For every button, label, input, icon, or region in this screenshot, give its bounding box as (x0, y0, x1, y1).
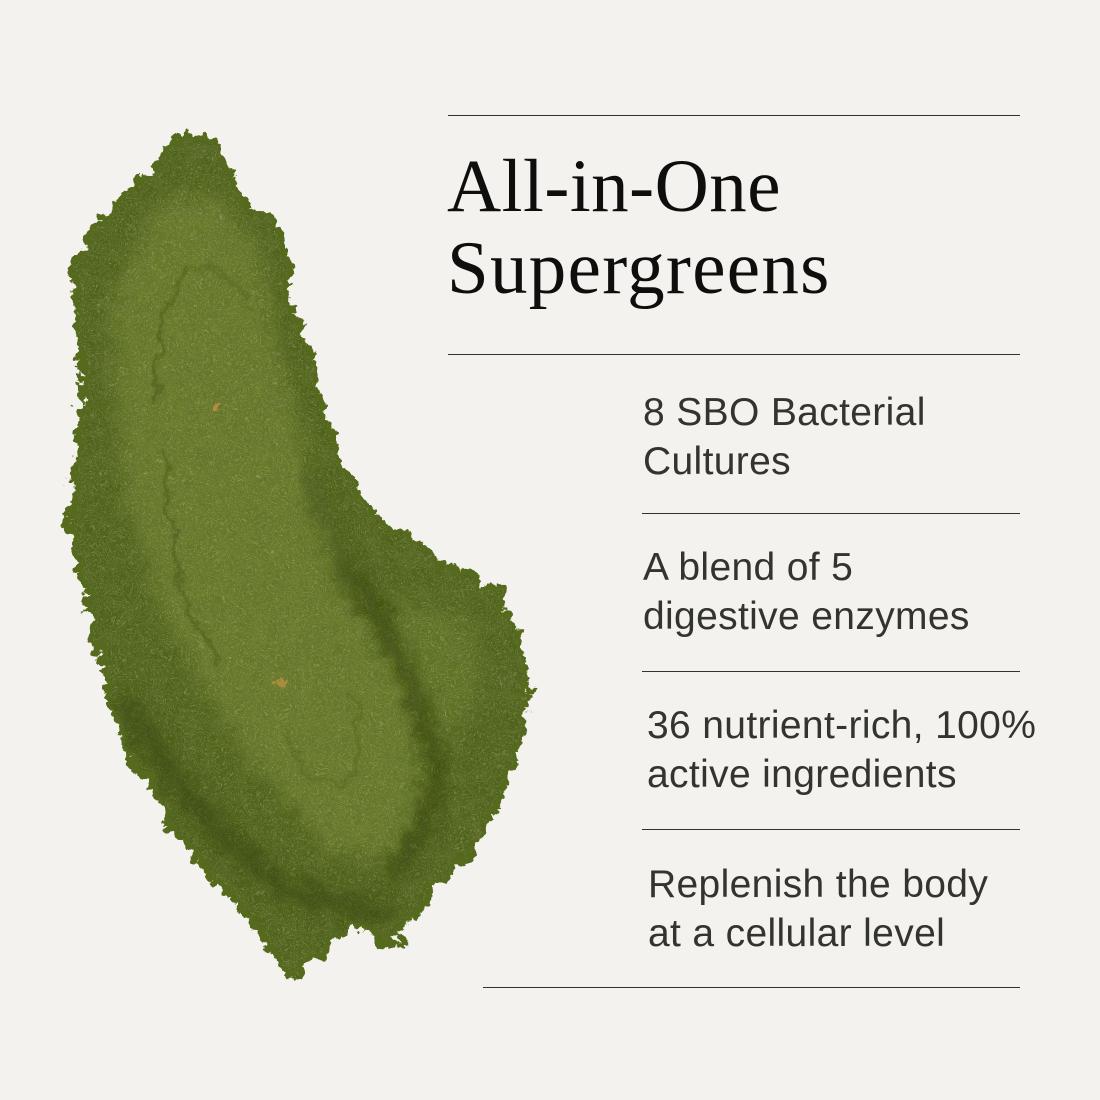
feature: bacterial cultures (643, 391, 926, 483)
feature: replenish: Replenish the body (648, 863, 988, 906)
bottom rule (483, 987, 1020, 988)
feature: digestive enzymes (643, 546, 970, 638)
title rule (448, 354, 1020, 355)
feature: replenish (648, 863, 988, 955)
feature: active ingredients (647, 704, 1036, 796)
feature: digestive enzymes: digestive enzymes (643, 595, 970, 638)
feature: bacterial cultures: 8 SBO Bacterial (643, 391, 926, 434)
powder swatch illustration (60, 128, 538, 981)
rule 1 (642, 513, 1020, 514)
inner smooth area (68, 138, 527, 977)
edge crumbs (71, 133, 527, 978)
feature: replenish: at a cellular level (648, 912, 945, 955)
title: All-in-One (447, 145, 781, 228)
feature: active ingredients: active ingredients (647, 753, 957, 796)
powder mass (69, 138, 527, 977)
rule 2 (642, 671, 1020, 672)
title: Supergreens (447, 227, 831, 310)
feature: digestive enzymes: A blend of 5 (643, 546, 853, 589)
dark crease shadows (350, 570, 437, 875)
rule 3 (642, 829, 1020, 830)
feature: active ingredients: 36 nutrient-rich, 100% (647, 704, 1036, 747)
powder body (50, 110, 550, 1000)
top rule (448, 115, 1020, 116)
title (447, 145, 831, 310)
feature: bacterial cultures: Cultures (643, 440, 791, 483)
